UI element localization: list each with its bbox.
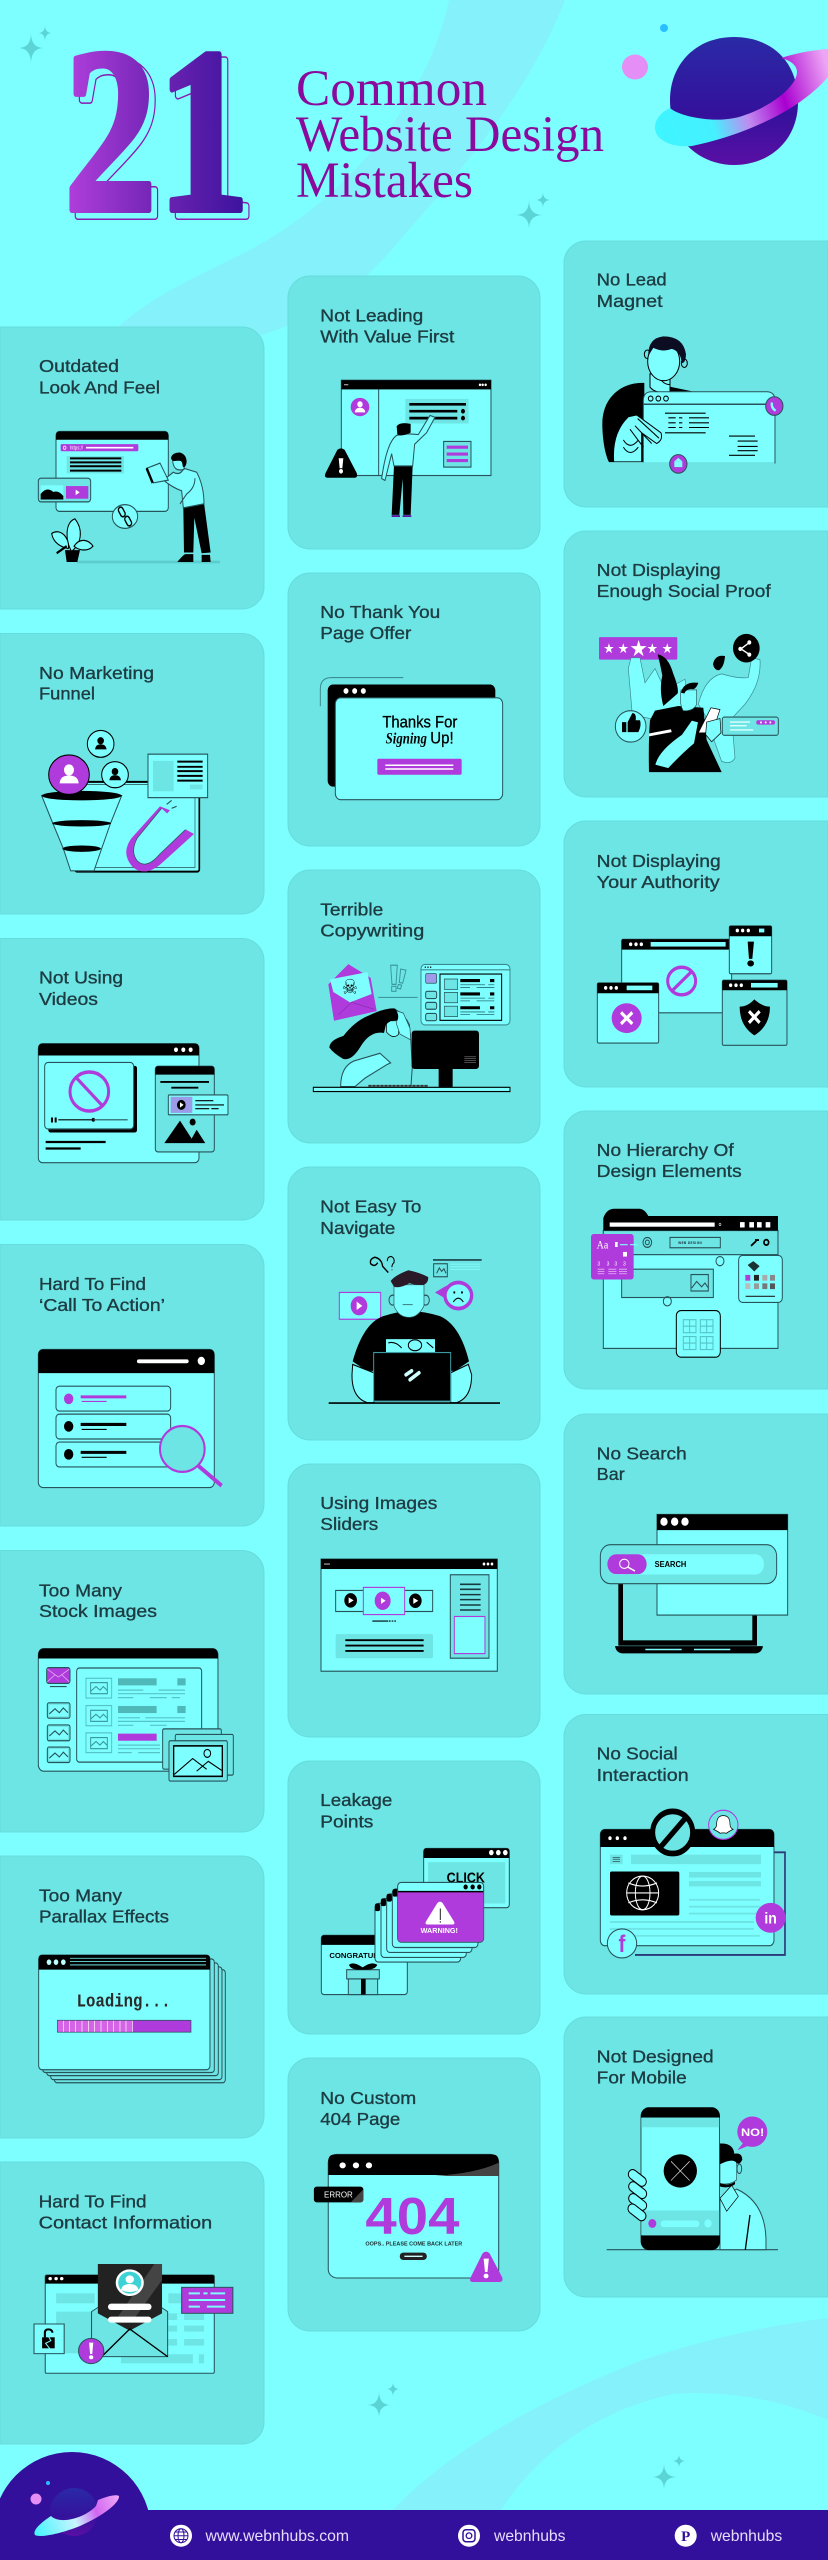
illustration: group with ratings: ★	[603, 642, 615, 657]
illustration: group with ratings: ★	[647, 642, 658, 657]
title: big number 21: 21	[64, 1, 250, 262]
illustration: 404 error window	[314, 2154, 503, 2282]
illustration: woman frustrated at monitor: ☠	[342, 975, 358, 999]
heading: Not Leading	[320, 306, 423, 326]
sparkles bottom right	[652, 2454, 686, 2490]
heading: ‘Call To Action’	[39, 1295, 165, 1315]
heading: Page Offer	[320, 623, 411, 643]
heading	[39, 1580, 157, 1621]
heading: Not Easy To	[320, 1196, 421, 1216]
heading: Not Using	[39, 968, 123, 988]
heading: Enough Social Proof	[597, 581, 771, 601]
panel: Not Displaying Enough Social Proof	[564, 531, 828, 797]
illustration: search bar over laptop	[600, 1514, 788, 1653]
illustration: layout with design tools: Aa	[597, 1239, 609, 1252]
illustration: social blocked window: f	[619, 1931, 626, 1957]
panel: No Hierarchy Of Design Elements	[564, 1111, 828, 1389]
heading: No Search	[597, 1443, 687, 1463]
heading: Bar	[597, 1464, 625, 1484]
illustration: woman frustrated at monitor	[313, 964, 510, 1092]
heading: Navigate	[320, 1218, 395, 1238]
illustration: slider window	[321, 1559, 497, 1671]
illustration: man holding web page	[602, 336, 783, 473]
sparkles bottom centre	[367, 2382, 400, 2418]
heading	[39, 663, 154, 704]
illustration: popup windows with warning: CLICK	[447, 1870, 485, 1886]
panel: No Social Interaction	[564, 1714, 828, 1994]
panel: Not Leading With Value First	[288, 276, 540, 549]
heading: Terrible	[320, 900, 383, 920]
sparkles top left	[18, 25, 52, 64]
illustration: social blocked window	[600, 1810, 786, 1958]
footer: website: www.webnhubs.com	[205, 2528, 349, 2545]
heading: Look And Feel	[39, 378, 160, 398]
title: big number 21: 21	[70, 7, 256, 268]
heading: Points	[320, 1811, 374, 1831]
illustration: list window with magnifier	[38, 1349, 222, 1488]
panel: Not Using Videos	[0, 938, 264, 1220]
footer: pinterest: P	[681, 2529, 690, 2545]
illustration: layout with design tools: WEB DESIGN	[678, 1241, 702, 1245]
panel: No Lead Magnet	[564, 241, 828, 507]
heading	[597, 560, 771, 601]
heading	[320, 2088, 416, 2129]
heading: Funnel	[39, 684, 95, 704]
illustration: funnel and magnet	[42, 730, 208, 872]
panel: No Custom 404 Page	[288, 2058, 540, 2331]
panel: Hard To Find Call To Action	[0, 1244, 264, 1526]
panel: Not Easy To Navigate	[288, 1167, 540, 1440]
illustration: person at page with warning	[325, 380, 491, 516]
illustration: thanks for signing up window	[320, 678, 503, 800]
heading	[320, 602, 440, 643]
illustration: 404 error window: 404	[365, 2188, 460, 2246]
illustration: 404 error window: ERROR	[324, 2190, 353, 2200]
illustration: layout with design tools: 3	[597, 1261, 600, 1268]
heading: Videos	[39, 989, 98, 1009]
panel: Hard To Find Contact Information	[0, 2162, 264, 2444]
heading	[597, 1443, 687, 1484]
illustration: blocked video window	[38, 1044, 228, 1163]
title: Common Website Design Mistakes: Common	[296, 61, 487, 117]
footer: pinterest	[675, 2525, 782, 2547]
footer: website	[170, 2525, 349, 2547]
heading: No Custom	[320, 2088, 416, 2108]
illustration: layout with design tools: 3	[623, 1261, 626, 1268]
icon: planet with ring	[622, 24, 828, 165]
panel: No Thank You Page Offer	[288, 573, 540, 846]
heading: Not Displaying	[597, 560, 721, 580]
footer: pinterest: webnhubs	[710, 2528, 782, 2545]
title: Common Website Design Mistakes: Website Design	[296, 107, 604, 163]
illustration: stacked loading windows	[39, 1955, 225, 2083]
heading	[597, 1744, 689, 1785]
illustration: group with ratings: ★	[629, 636, 648, 662]
footer planet logo	[30, 2481, 119, 2536]
panel: Using Images Sliders	[288, 1464, 540, 1737]
heading	[320, 1493, 438, 1534]
heading: No Lead	[597, 270, 667, 290]
illustration: layout with design tools	[591, 1209, 782, 1357]
illustration: person behind phone	[607, 2107, 778, 2250]
heading	[320, 900, 424, 940]
heading: Your Authority	[597, 872, 720, 892]
illustration: thanks for signing up window: Signing	[386, 731, 427, 748]
heading: Parallax Effects	[39, 1907, 169, 1927]
heading: No Hierarchy Of	[597, 1140, 734, 1160]
footer: instagram	[458, 2525, 566, 2547]
panel: Leakage Points	[288, 1761, 540, 2034]
background swoosh top	[100, 0, 565, 345]
panel: Not Designed For Mobile	[564, 2017, 828, 2297]
footer: instagram: webnhubs	[493, 2528, 566, 2545]
footer band	[0, 2452, 828, 2560]
heading: Interaction	[597, 1765, 689, 1785]
heading	[39, 1274, 165, 1315]
heading	[39, 356, 160, 398]
heading	[597, 2046, 714, 2088]
panel: No Search Bar	[564, 1414, 828, 1694]
heading	[597, 851, 721, 892]
heading	[39, 2192, 212, 2233]
heading: For Mobile	[597, 2068, 687, 2088]
illustration: person behind phone: NO!	[741, 2127, 764, 2139]
panel: Not Displaying Your Authority	[564, 821, 828, 1087]
illustration: popup windows with warning: CONGRATUL	[329, 1952, 379, 1960]
heading: Magnet	[597, 291, 663, 311]
heading: No Marketing	[39, 663, 154, 683]
illustration: stacked loading windows: Loading...	[77, 1992, 171, 2013]
heading: With Value First	[320, 326, 454, 346]
illustration: blocked authority windows	[597, 926, 787, 1045]
heading: Hard To Find	[39, 2192, 147, 2212]
heading	[39, 968, 123, 1009]
heading	[320, 1790, 392, 1831]
heading: Copywriting	[320, 920, 424, 940]
heading: Sliders	[320, 1514, 379, 1534]
heading	[320, 1196, 421, 1238]
heading	[39, 1886, 169, 1927]
illustration: thanks for signing up window: Thanks For	[382, 713, 457, 732]
illustration: browser with person: https://	[70, 445, 84, 452]
heading: Hard To Find	[39, 1274, 146, 1294]
illustration: group with ratings: ★	[662, 642, 673, 657]
illustration: popup windows with warning	[321, 1848, 509, 1995]
illustration: layout with design tools: 3	[607, 1261, 609, 1268]
title: Common Website Design Mistakes: Mistakes	[296, 153, 473, 209]
illustration: stock images window	[38, 1649, 233, 1781]
panel: Terrible Copywriting	[288, 870, 540, 1143]
heading: Leakage	[320, 1790, 392, 1810]
illustration: group with ratings: ★	[618, 642, 629, 657]
panel: No Marketing Funnel	[0, 634, 264, 914]
heading: No Social	[597, 1744, 678, 1764]
background swoosh bottom	[393, 2318, 828, 2510]
heading: Contact Information	[39, 2213, 212, 2233]
panel: Outdated Look And Feel	[0, 327, 264, 609]
heading: Stock Images	[39, 1601, 157, 1621]
illustration: group with ratings	[599, 634, 778, 772]
illustration: search bar over laptop: SEARCH	[655, 1559, 687, 1569]
panel: Too Many Parallax Effects	[0, 1856, 264, 2138]
heading: Using Images	[320, 1493, 438, 1513]
heading: Design Elements	[597, 1161, 742, 1181]
heading: Too Many	[39, 1886, 122, 1906]
illustration: browser with person	[38, 432, 220, 562]
illustration: contact card envelope	[34, 2264, 233, 2373]
illustration: 404 error window: OOPS.. PLEASE COME BACK LATER	[365, 2242, 462, 2248]
heading: Not Displaying	[597, 851, 721, 871]
illustration: popup windows with warning: WARNING!	[421, 1928, 458, 1935]
heading	[597, 270, 667, 311]
heading: Too Many	[39, 1580, 122, 1600]
title: big number 21: 21	[70, 7, 256, 268]
panel: Too Many Stock Images	[0, 1550, 264, 1832]
sparkles top centre	[515, 192, 551, 229]
heading	[597, 1140, 742, 1181]
illustration: social blocked window: in	[764, 1910, 777, 1928]
heading	[320, 306, 454, 346]
heading: Outdated	[39, 356, 119, 376]
heading: No Thank You	[320, 602, 440, 622]
illustration: thanks for signing up window: Up!	[430, 730, 454, 748]
title: Common Website Design Mistakes	[296, 61, 604, 209]
illustration: layout with design tools: 3	[614, 1261, 617, 1268]
heading: Not Designed	[597, 2046, 714, 2066]
illustration: confused man at laptop	[329, 1256, 500, 1403]
heading: 404 Page	[320, 2109, 400, 2129]
